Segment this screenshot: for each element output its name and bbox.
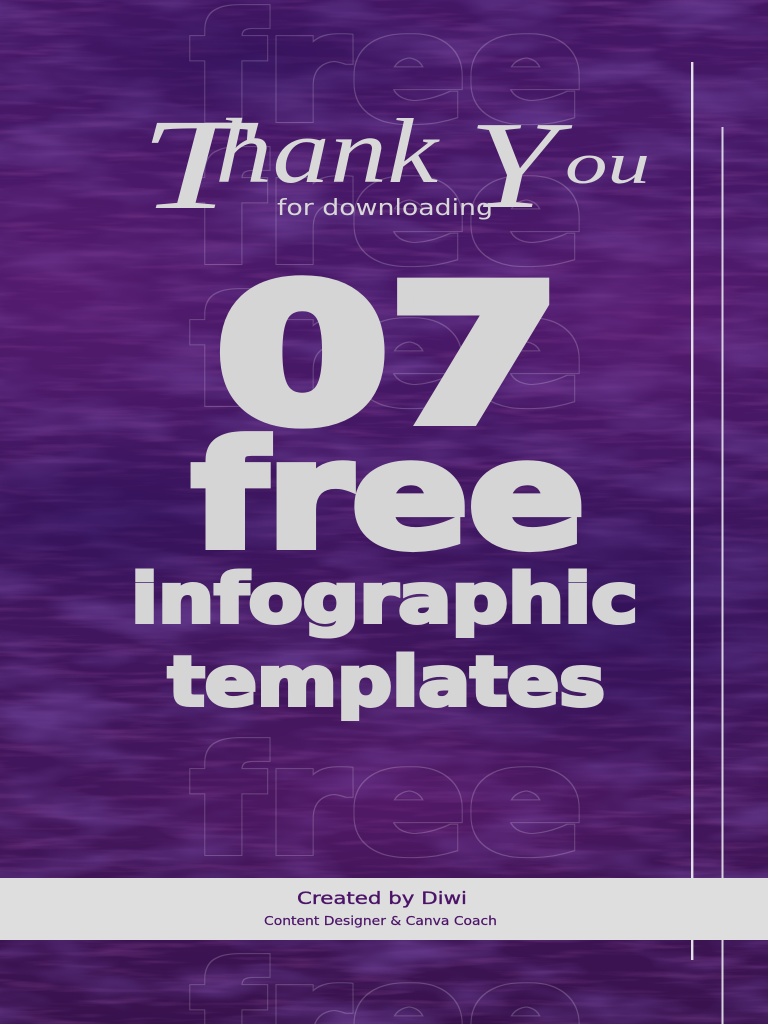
credit: Created by Diwi: Created by Diwi	[297, 889, 467, 909]
outlined watermark words: free	[190, 0, 584, 1024]
footer band	[0, 878, 768, 940]
headline: infographic: infographic	[131, 560, 638, 639]
headline: templates: templates	[168, 643, 605, 722]
headline: free: free	[192, 411, 585, 581]
vertical rule: right	[722, 127, 724, 1024]
credit role: Content Designer and Canva Coach: Content Designer & Canva Coach	[264, 913, 497, 928]
heading: Thank You: T	[139, 93, 258, 237]
outlined watermark words: free: free	[190, 126, 584, 296]
big number: 07: 07	[216, 247, 561, 465]
heading: Thank You: ou	[565, 131, 650, 196]
heading: Thank You: Y	[468, 97, 573, 235]
vertical rule: long	[691, 62, 693, 960]
outlined watermark words: free: free	[190, 268, 584, 438]
heading: Thank You: hank	[215, 100, 441, 202]
subheading: for downloading: for downloading	[277, 196, 493, 221]
outlined watermark words: free: free	[190, 717, 584, 887]
